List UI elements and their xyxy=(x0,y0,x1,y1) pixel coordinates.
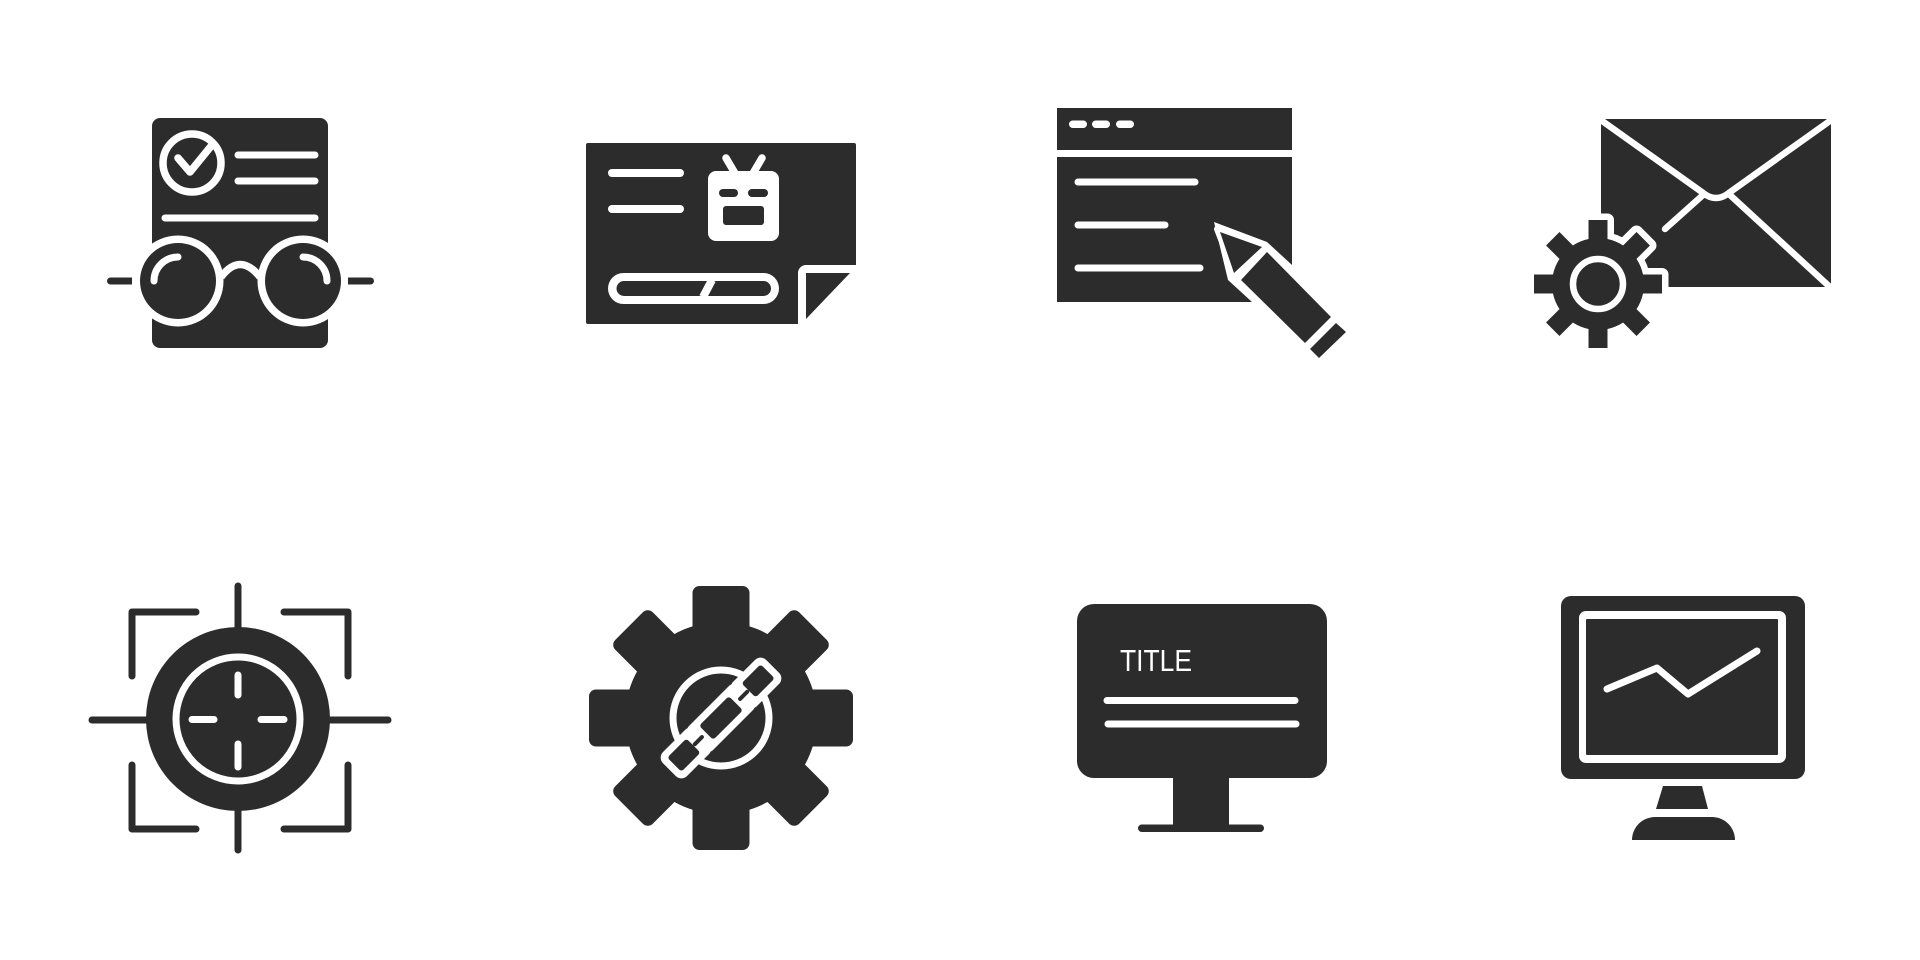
screen text lines xyxy=(1107,700,1296,724)
glasses lenses xyxy=(132,236,348,326)
window body xyxy=(1057,157,1292,302)
screen xyxy=(1586,619,1778,755)
window dots xyxy=(1069,120,1134,128)
window title bar xyxy=(1057,108,1292,150)
gear white halo xyxy=(1552,220,1662,330)
flyer text lines xyxy=(612,173,680,209)
monitor neck xyxy=(1656,786,1708,809)
monitor screen xyxy=(1077,604,1327,778)
icon: monitor with title slide xyxy=(1077,604,1327,832)
gear xyxy=(1534,220,1662,348)
icon: target crosshair xyxy=(92,586,388,850)
screen frame xyxy=(1579,611,1786,763)
document page xyxy=(152,118,328,348)
pencil xyxy=(1217,229,1346,358)
robot head xyxy=(708,158,779,241)
flyer page xyxy=(586,143,856,324)
inner ticks xyxy=(192,675,284,767)
window text lines xyxy=(1078,182,1200,268)
chain link xyxy=(653,650,789,786)
monitor base xyxy=(1632,817,1735,840)
icon: envelope with gear xyxy=(1534,118,1834,348)
monitor stand xyxy=(1138,770,1264,832)
check badge xyxy=(163,134,221,192)
icon: monitor with line chart xyxy=(1561,596,1805,840)
screen title: TITLE xyxy=(1120,643,1192,678)
corner brackets xyxy=(132,612,348,829)
document text lines xyxy=(165,155,315,218)
folded corner xyxy=(806,273,850,319)
monitor body xyxy=(1561,596,1805,779)
target disc xyxy=(146,627,330,811)
icon: folded flyer with robot xyxy=(586,143,856,324)
gear xyxy=(589,586,853,850)
gear inner ring xyxy=(673,670,769,766)
glasses temples xyxy=(107,278,374,284)
line chart xyxy=(1607,651,1757,694)
icon: document with reading glasses xyxy=(107,118,374,348)
icon: browser window with pencil xyxy=(1057,108,1346,358)
search bar pill xyxy=(608,273,779,304)
icon: gear with chain link xyxy=(589,586,853,850)
envelope xyxy=(1598,118,1834,288)
inner ring xyxy=(176,657,300,781)
crosshair lines xyxy=(92,586,388,850)
